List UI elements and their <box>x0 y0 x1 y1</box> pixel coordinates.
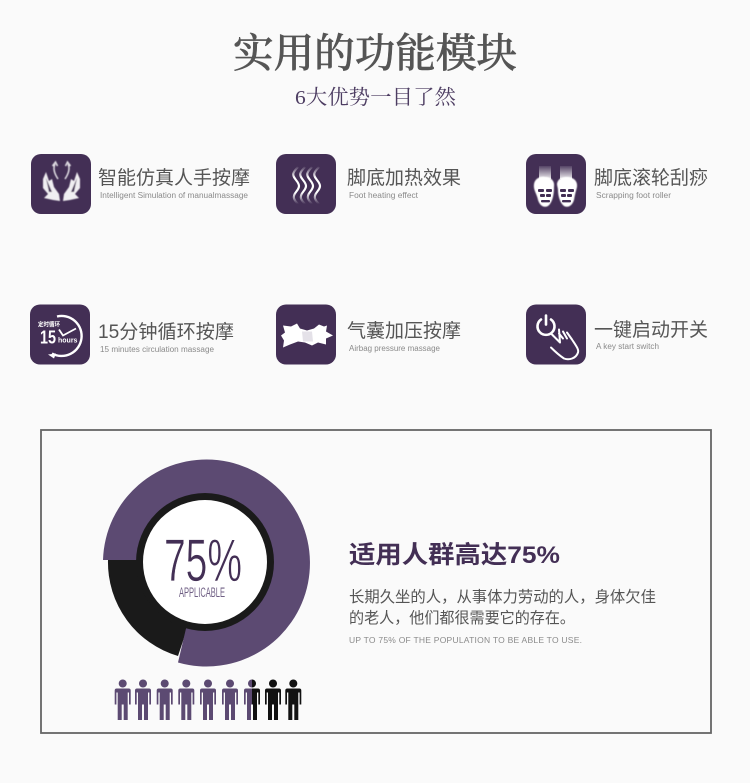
feature: one key start <box>526 304 708 364</box>
icon: clock: 定时循环 <box>38 320 60 328</box>
label: 15分钟循环按摩 <box>98 321 234 343</box>
sublabel: 15 minutes circulation massage <box>100 345 215 354</box>
body text <box>349 588 656 627</box>
feature: foot heating <box>276 154 461 214</box>
sublabel: Airbag pressure massage <box>349 344 441 353</box>
sublabel: A key start switch <box>596 342 659 351</box>
title: 实用的功能模块 <box>233 31 517 76</box>
body text: 的老人，他们都很需要它的存在。 <box>349 609 575 627</box>
feature: intelligent massage <box>31 154 250 214</box>
icon: massage hands <box>31 154 91 214</box>
pictogram: people <box>115 680 301 720</box>
heading: 适用人群高达75% <box>349 541 560 569</box>
donut chart: 75% <box>103 459 310 666</box>
sublabel: Scrapping foot roller <box>596 191 671 200</box>
icon: heat waves <box>276 154 336 214</box>
feature: airbag pressure <box>276 304 461 364</box>
label: 脚底加热效果 <box>347 167 461 189</box>
caption: UP TO 75% OF THE POPULATION TO BE ABLE TO USE. <box>349 635 582 645</box>
label: 智能仿真人手按摩 <box>98 167 250 189</box>
subtitle: 6大优势一目了然 <box>295 86 457 109</box>
icon: airbag <box>276 304 336 364</box>
label: 一键启动开关 <box>594 319 708 341</box>
icon: clock: 15 <box>40 328 56 348</box>
body text: 长期久坐的人，从事体力劳动的人，身体欠佳 <box>349 588 656 606</box>
feature: 15 minute cycle <box>30 304 234 364</box>
icon: clock: hours <box>58 338 78 344</box>
icon: clock <box>30 304 90 364</box>
label: 脚底滚轮刮痧 <box>594 167 708 189</box>
icon: power button and hand <box>526 304 586 364</box>
icon: feet <box>526 154 586 214</box>
donut chart: 75%: 75% <box>164 527 242 594</box>
feature: foot roller <box>526 154 708 214</box>
donut chart: 75%: APPLICABLE <box>179 585 225 600</box>
panel: applicable population <box>41 430 711 733</box>
sublabel: Foot heating effect <box>349 191 419 200</box>
label: 气囊加压按摩 <box>347 320 461 342</box>
sublabel: Intelligent Simulation of manualmassage <box>100 191 249 200</box>
